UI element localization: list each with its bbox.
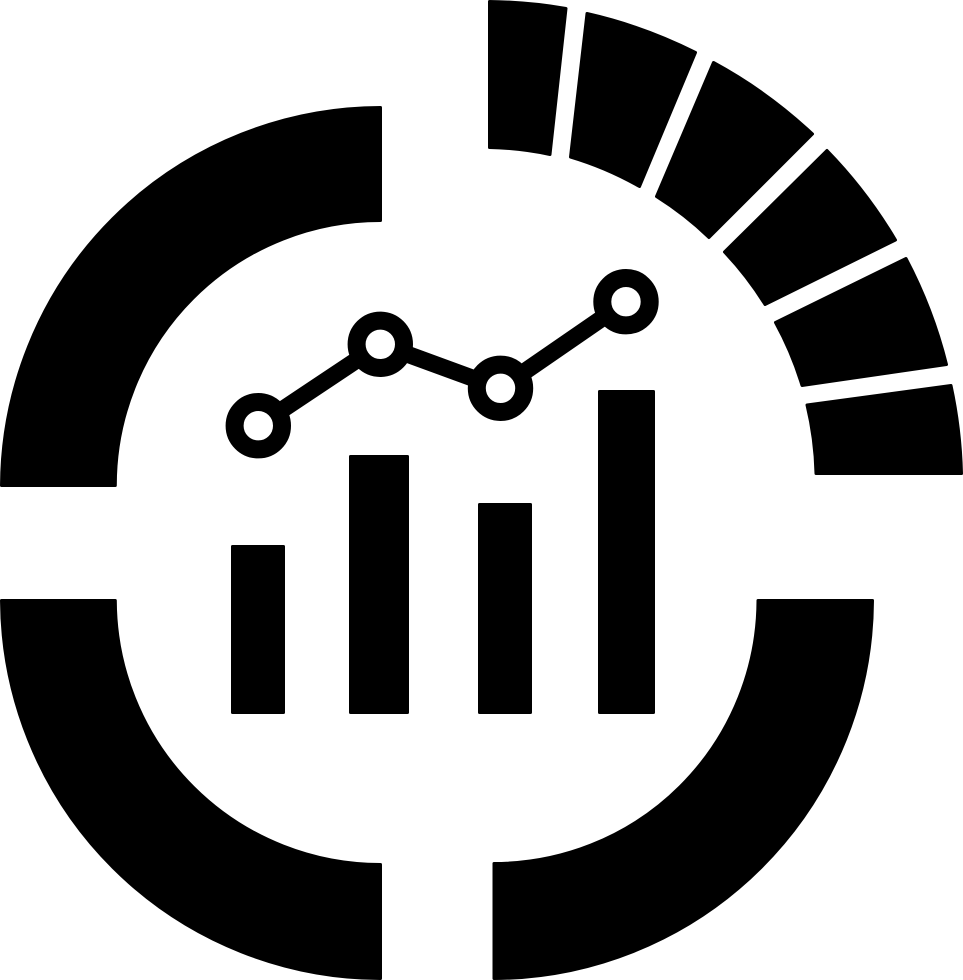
ring segment: bottom right [494,600,872,978]
bar chart [231,390,655,714]
gauge segment 6 [807,386,962,474]
gauge segment 4 [724,150,896,304]
trend line [258,302,626,426]
bar 3 [478,503,532,714]
gauge: six top right segments [490,2,962,474]
data point 2 [357,321,404,368]
gauge segment 5 [776,258,946,386]
bar 2 [349,455,409,714]
ring segment: top left [2,108,380,486]
gauge segment 2 [570,14,696,186]
gauge segment 3 [656,62,812,238]
data point 4 [602,278,650,325]
data point 3 [477,365,524,412]
ring segment: bottom left [2,600,380,978]
line chart [235,278,650,449]
gauge segment 1 [490,2,566,154]
data point 1 [235,402,282,449]
bar 4 [598,390,655,714]
bar 1 [231,545,285,714]
